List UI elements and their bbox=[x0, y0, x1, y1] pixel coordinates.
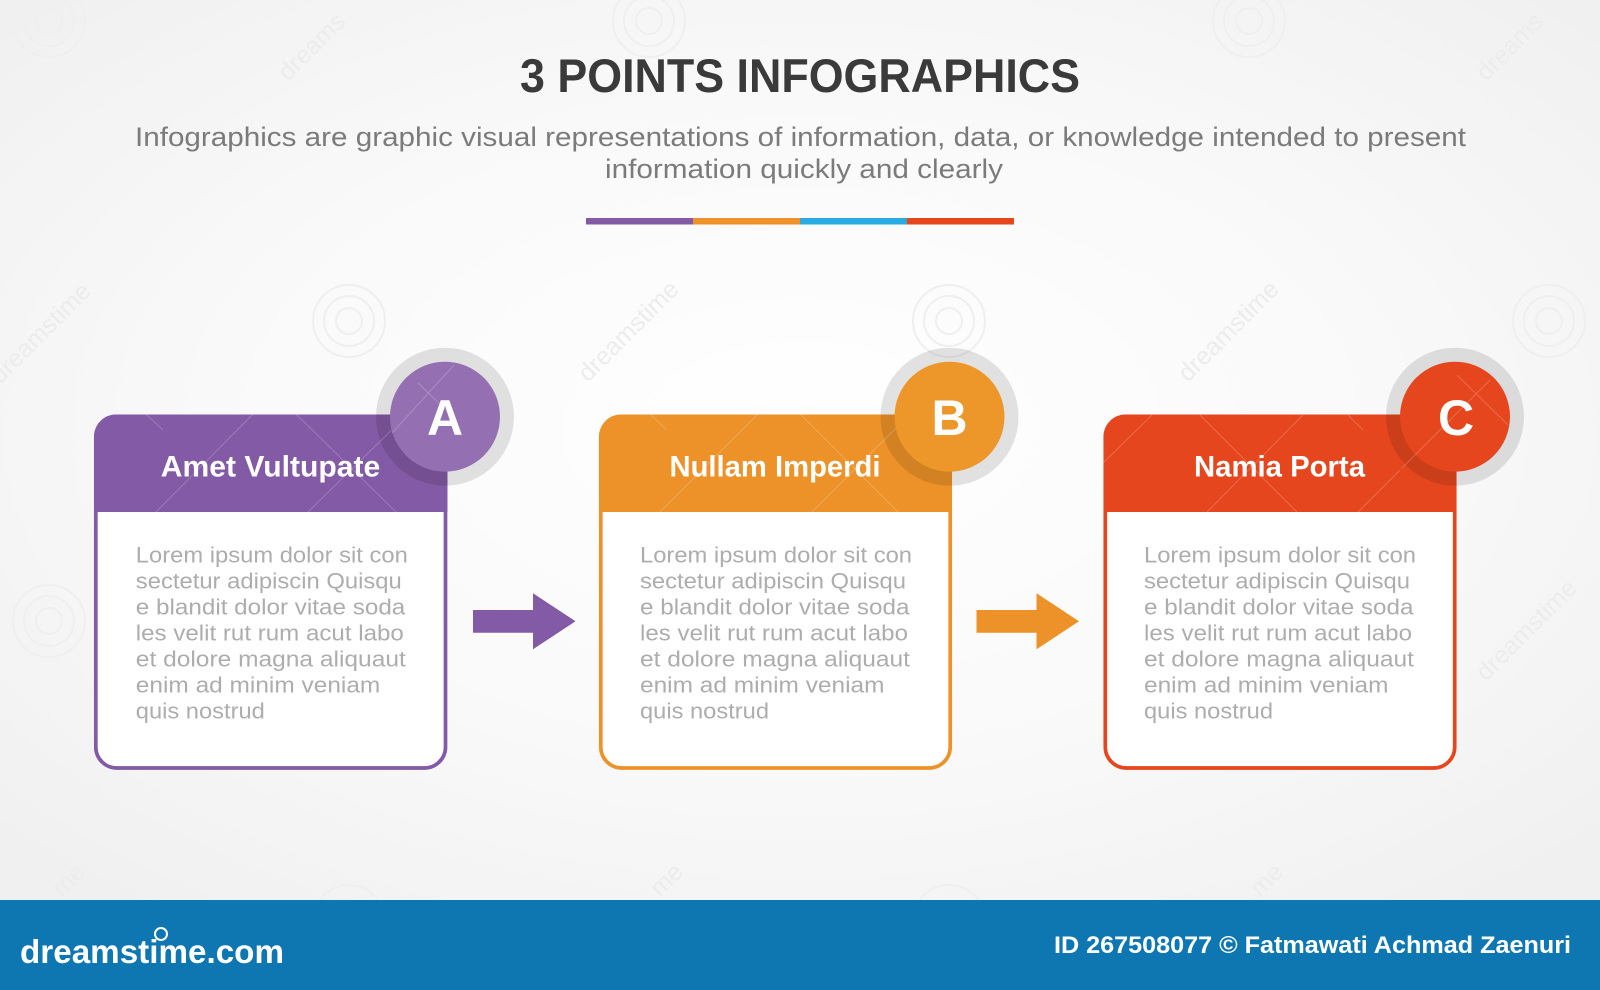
body text A: Lorem ipsum dolor sit con bbox=[136, 543, 408, 568]
body text A: quis nostrud bbox=[136, 699, 265, 724]
card body A bbox=[96, 416, 446, 768]
subtitle bbox=[135, 122, 1467, 184]
body text B: quis nostrud bbox=[640, 699, 769, 724]
subtitle: information quickly and clearly bbox=[605, 154, 1004, 184]
colour divider bar bbox=[586, 218, 1014, 224]
body text A: e blandit dolor vitae soda bbox=[136, 595, 406, 620]
body text A: et dolore magna aliquaut bbox=[136, 647, 406, 672]
text: dreams bbox=[1470, 7, 1549, 86]
body text B: enim ad minim veniam bbox=[640, 673, 884, 698]
text: me bbox=[1244, 858, 1289, 902]
body text B: sectetur adipiscin Quisqu bbox=[640, 569, 906, 594]
badge C bbox=[1400, 362, 1510, 472]
body text C: les velit rut rum acut labo bbox=[1144, 621, 1412, 646]
footer bar bbox=[0, 900, 1600, 990]
heading A: Amet Vultupate bbox=[161, 450, 380, 484]
body text C: et dolore magna aliquaut bbox=[1144, 647, 1414, 672]
body text B: et dolore magna aliquaut bbox=[640, 647, 910, 672]
body text B: Lorem ipsum dolor sit con bbox=[640, 543, 912, 568]
panel: Nullam Imperdi bbox=[599, 348, 1018, 768]
footer logo: dreamstime.com bbox=[20, 933, 284, 970]
body text B bbox=[640, 543, 912, 724]
text: me bbox=[46, 858, 91, 902]
body text B: les velit rut rum acut labo bbox=[640, 621, 908, 646]
footer credit: ID 267508077 © Fatmawati Achmad Zaenuri bbox=[1054, 932, 1571, 959]
badge C: C bbox=[1438, 390, 1474, 446]
text: dreams bbox=[272, 7, 351, 86]
badge B: B bbox=[931, 390, 968, 446]
body text B: e blandit dolor vitae soda bbox=[640, 595, 910, 620]
arrow: B to C bbox=[976, 593, 1079, 649]
arrow: A to B bbox=[473, 593, 576, 649]
badge A bbox=[390, 362, 500, 472]
body text C: sectetur adipiscin Quisqu bbox=[1144, 569, 1410, 594]
text: dreamstime bbox=[1172, 275, 1285, 387]
card body B bbox=[601, 416, 950, 768]
body text C bbox=[1144, 543, 1416, 724]
heading B: Nullam Imperdi bbox=[670, 450, 880, 484]
heading C: Namia Porta bbox=[1194, 450, 1366, 484]
body text A: sectetur adipiscin Quisqu bbox=[136, 569, 402, 594]
badge A: A bbox=[427, 390, 463, 446]
panel: Namia Porta bbox=[1103, 348, 1524, 768]
text: dreamstime bbox=[572, 275, 685, 387]
text: me bbox=[644, 858, 689, 902]
badge B bbox=[894, 362, 1004, 472]
title: 3 POINTS INFOGRAPHICS bbox=[520, 49, 1080, 102]
body text A: enim ad minim veniam bbox=[136, 673, 380, 698]
body text C: enim ad minim veniam bbox=[1144, 673, 1388, 698]
card header C bbox=[1104, 414, 1456, 512]
body text C: quis nostrud bbox=[1144, 699, 1273, 724]
card header A bbox=[94, 414, 448, 512]
text: dreamstime bbox=[1470, 574, 1583, 686]
body text A: les velit rut rum acut labo bbox=[136, 621, 404, 646]
panel: Amet Vultupate bbox=[94, 348, 514, 768]
card body C bbox=[1105, 416, 1455, 768]
body text C: e blandit dolor vitae soda bbox=[1144, 595, 1414, 620]
body text A bbox=[136, 543, 408, 724]
body text C: Lorem ipsum dolor sit con bbox=[1144, 543, 1416, 568]
card header B bbox=[599, 414, 952, 512]
subtitle: Infographics are graphic visual representations of information, data, or knowledge intended to present bbox=[135, 122, 1467, 152]
